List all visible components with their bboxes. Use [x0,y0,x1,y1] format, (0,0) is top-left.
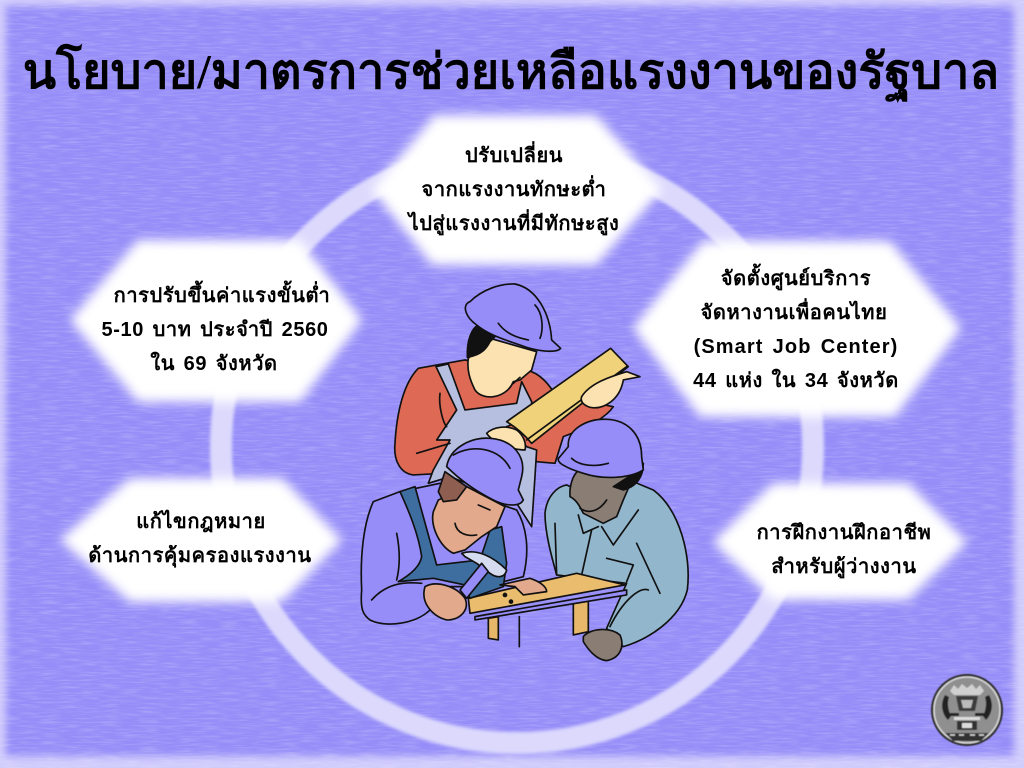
text: reskilling: จากแรงงานทักษะต่ำ [422,174,606,201]
worker: right, blue shirt [545,419,688,661]
text: smart job center: (Smart Job Center) [694,336,898,358]
table board [468,573,627,647]
worker: top, red shirt [395,284,640,527]
hexagon: vocational training [713,483,967,600]
text: vocational training: สำหรับผู้ว่างงาน [771,555,917,580]
text: reskilling: ไปสู่แรงงานที่มีทักษะสูง [407,208,619,237]
text: smart job center: จัดตั้งศูนย์บริการ [721,263,871,292]
text: labour law: แก้ไขกฎหมาย [136,509,266,533]
hexagon: smart job center [633,241,961,417]
text: vocational training: การฝึกงานฝึกอาชีพ [757,521,931,544]
title: นโยบาย/มาตรการช่วยเหลือแรงงานของรัฐบาล [23,43,999,103]
text: reskilling: ปรับเปลี่ยน [465,140,563,167]
hexagon: minimum wage [70,240,362,402]
text: smart job center: จัดหางานเพื่อคนไทย [701,297,887,324]
worker: left, blue overalls [361,438,547,624]
text: labour law: ด้านการคุ้มครองแรงงาน [88,544,312,568]
hexagon: reskilling [372,115,662,265]
emblem: government seal [931,674,1003,746]
illustration: three construction workers [361,284,688,661]
text: minimum wage: 5-10 บาท ประจำปี 2560 [101,318,329,341]
text: minimum wage: ใน 69 จังหวัด [150,351,278,375]
text: minimum wage: การปรับขึ้นค่าแรงขั้นต่ำ [114,280,330,307]
hexagon: labour law [60,478,342,602]
connecting ring [221,151,813,743]
text: smart job center: 44 แห่ง ใน 34 จังหวัด [693,368,899,392]
